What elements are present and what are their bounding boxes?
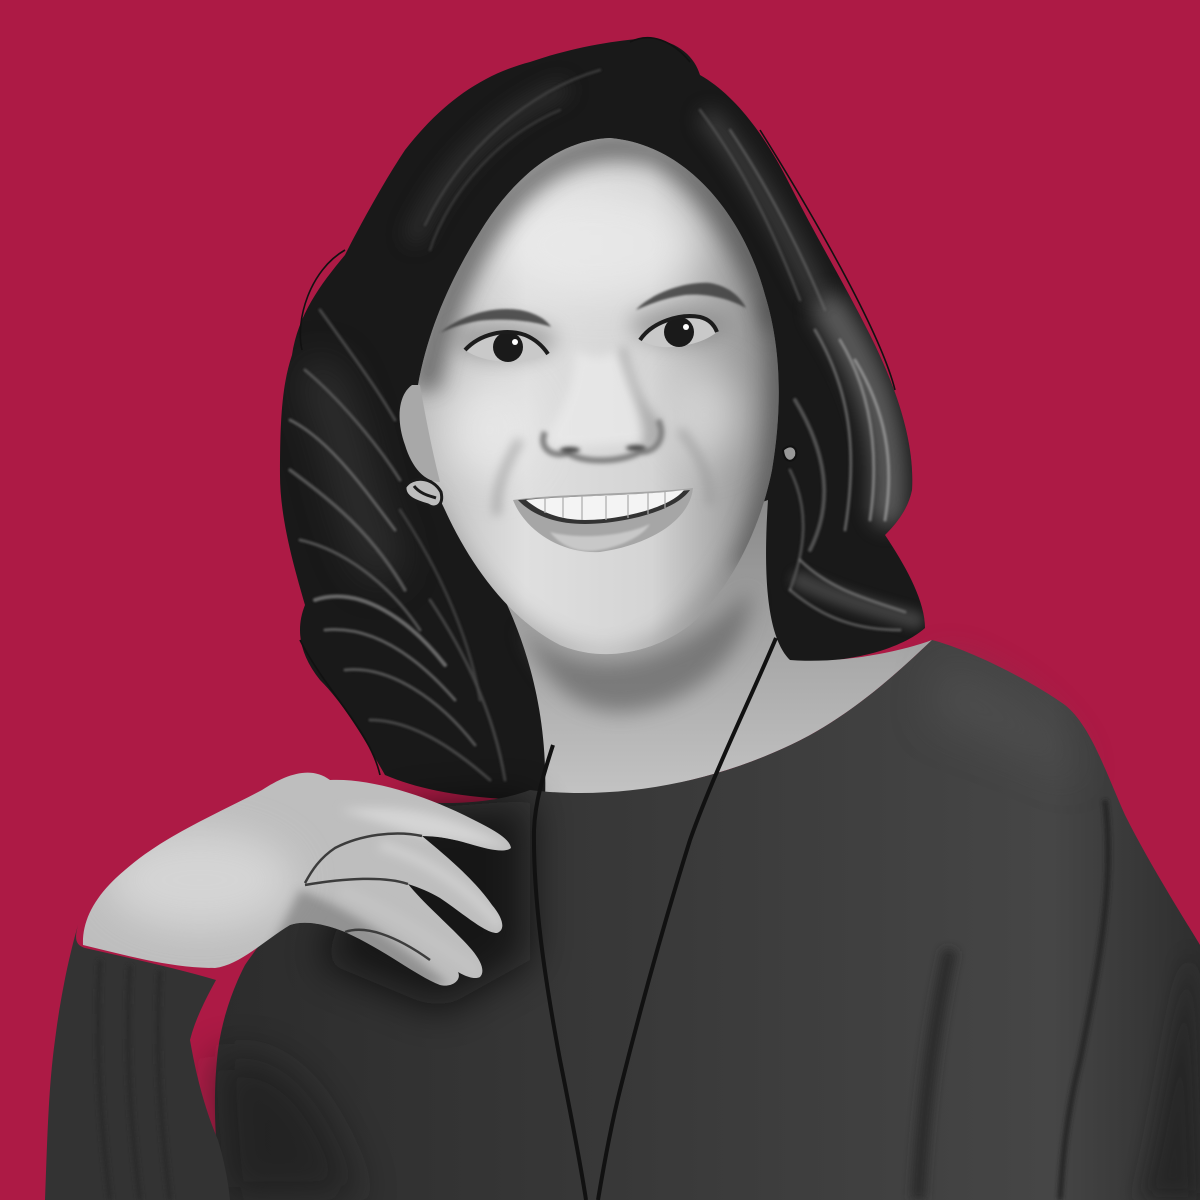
left sleeve <box>45 925 230 1200</box>
finger creases <box>305 833 430 960</box>
hairline shadow <box>410 130 790 390</box>
earring left <box>405 479 442 507</box>
face <box>410 130 800 660</box>
hair highlights <box>290 70 915 780</box>
lanyard <box>534 638 776 1200</box>
neck and chest <box>500 500 932 800</box>
right side shadow <box>725 304 778 572</box>
stray hair lines <box>300 38 895 775</box>
smile lines <box>497 430 710 515</box>
hair <box>280 38 925 800</box>
eye socket shading <box>453 305 730 360</box>
eye right <box>640 316 717 347</box>
mouth <box>513 488 693 552</box>
sweater body <box>215 640 1200 1200</box>
strands <box>290 70 905 780</box>
hand <box>83 773 511 990</box>
eye left <box>465 332 548 362</box>
earring right <box>783 446 796 461</box>
eyebrow left <box>440 309 551 333</box>
jaw shadow <box>442 498 741 654</box>
sweater shading <box>215 660 1200 1200</box>
teeth <box>526 490 684 520</box>
cheek glow <box>445 380 535 480</box>
forehead glow <box>500 190 700 300</box>
lower lip highlight <box>550 524 650 551</box>
neck shadow <box>520 590 750 712</box>
eyebrow right <box>636 283 746 310</box>
nose <box>543 345 661 460</box>
left ear <box>400 385 440 482</box>
